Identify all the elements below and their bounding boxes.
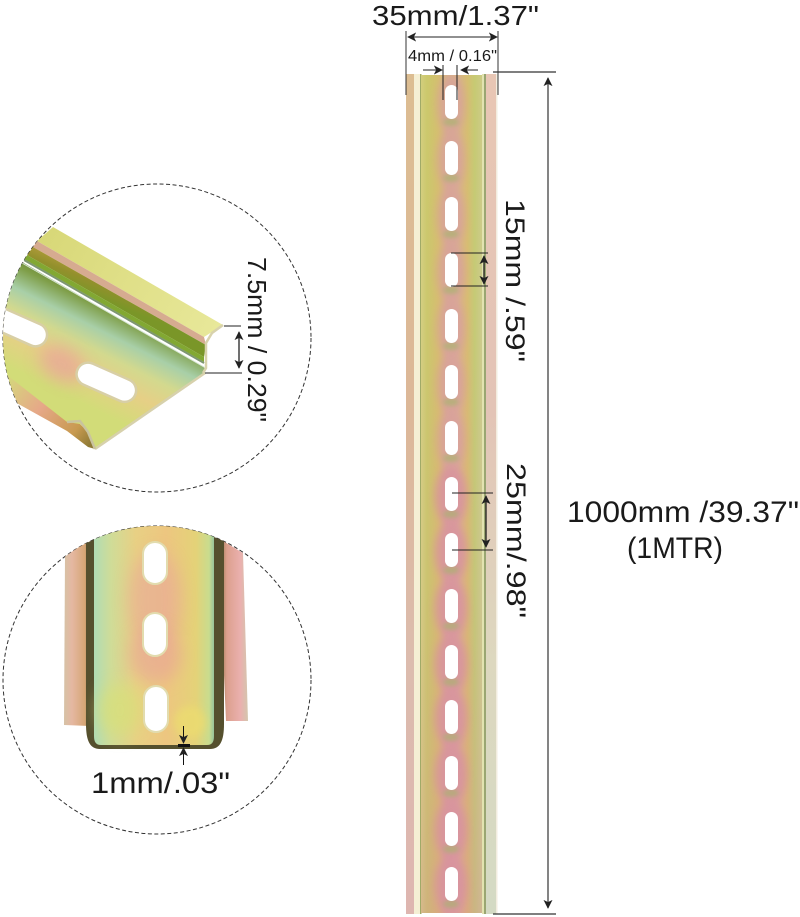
thickness label: 1mm/.03" xyxy=(91,767,230,800)
rail mounting slots xyxy=(445,85,458,901)
main DIN rail photo xyxy=(406,74,498,915)
detail circle: rail height profile xyxy=(0,184,311,492)
angled rail photo xyxy=(0,227,223,449)
rail centre channel xyxy=(421,74,482,915)
slot pitch dimension 25mm: 25mm/.98" xyxy=(501,463,531,618)
right flange xyxy=(486,74,497,914)
total length dimension 1000mm: 1000mm /39.37" xyxy=(567,496,799,529)
height label: 7.5mm / 0.29" xyxy=(242,257,272,422)
total length dimension 1000mm: (1MTR) xyxy=(627,532,723,565)
slot pitch dimension 25mm xyxy=(452,463,531,618)
front rail photo xyxy=(64,525,248,749)
slot width dimension 4mm: 4mm / 0.16" xyxy=(408,48,497,65)
thickness arrows xyxy=(178,726,190,765)
left flange xyxy=(406,74,416,914)
slot length dimension 15mm: 15mm /.59" xyxy=(500,199,530,362)
height arrows xyxy=(205,326,242,373)
slot length dimension 15mm xyxy=(451,199,530,362)
total length dimension 1000mm xyxy=(493,72,799,914)
detail circle: rail thickness xyxy=(3,525,311,834)
width dimension 35mm xyxy=(372,0,539,95)
slot width dimension 4mm xyxy=(408,48,497,100)
width dimension 35mm: 35mm/1.37" xyxy=(372,0,539,31)
